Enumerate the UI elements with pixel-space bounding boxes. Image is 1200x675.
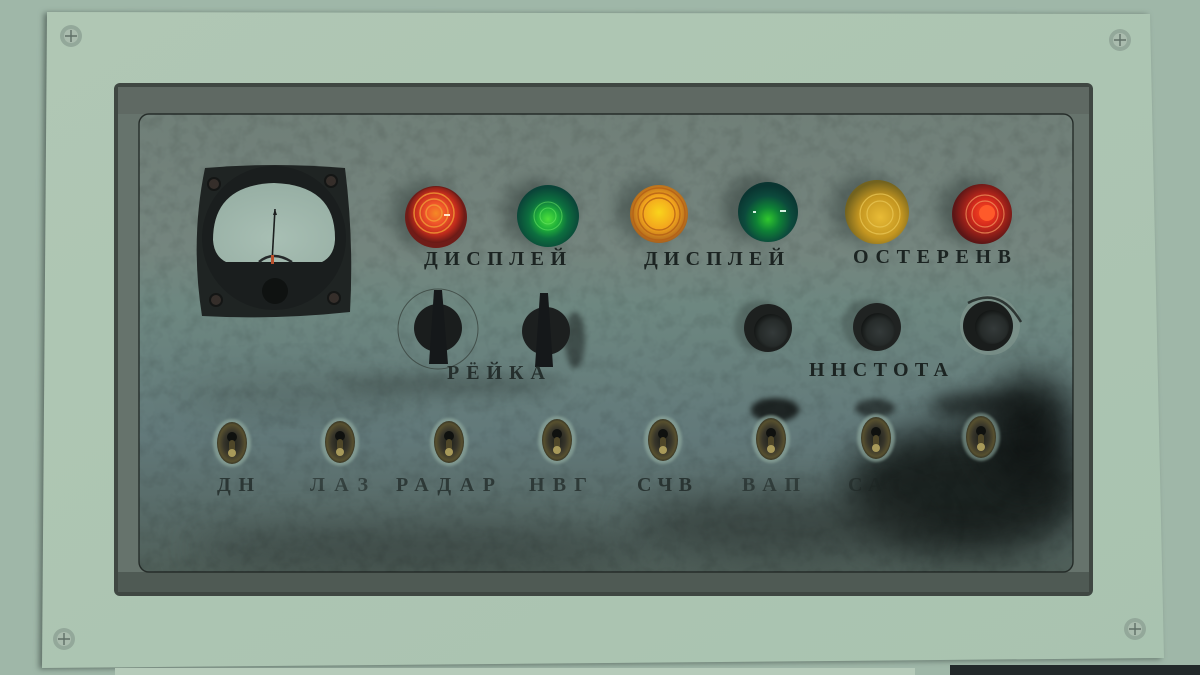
label: ДН: ДН xyxy=(217,474,254,496)
toggle labels xyxy=(217,474,904,496)
lamp: green xyxy=(504,180,579,247)
label: ЛАЗ: ЛАЗ xyxy=(310,474,368,496)
toggle 4 xyxy=(538,416,576,464)
recessed panel rim xyxy=(114,83,1093,596)
meter needle xyxy=(259,209,292,264)
label: РЁЙКА: РЁЙКА xyxy=(447,361,546,384)
toggle 5 xyxy=(644,416,682,464)
instrument plate xyxy=(139,114,1085,572)
rotary switch right xyxy=(522,293,570,367)
indicator lamps xyxy=(392,175,1012,248)
toggle 7 xyxy=(857,414,895,462)
bottom edge strips xyxy=(115,665,1200,675)
toggle 3 xyxy=(430,418,468,466)
toggle 6 xyxy=(752,415,790,463)
label: ДИСПЛЕЙ left: ДИСПЛЕЙ xyxy=(424,247,566,270)
label: ОСТЕРЕНВ: ОСТЕРЕНВ xyxy=(853,246,1011,268)
toggle 8 xyxy=(962,413,1000,461)
push button 3 xyxy=(960,295,1021,355)
label: РАДАР: РАДАР xyxy=(396,474,495,496)
rotary switch left xyxy=(398,289,478,369)
label: ДИСПЛЕЙ middle: ДИСПЛЕЙ xyxy=(644,247,784,270)
label: СЧВ: СЧВ xyxy=(637,474,692,496)
meter dial window xyxy=(213,183,335,262)
lamp: dark green xyxy=(722,176,798,242)
meter adjustment knob xyxy=(262,278,288,304)
lamp: orange xyxy=(616,179,688,243)
label: НВГ: НВГ xyxy=(529,474,587,496)
toggle 1 xyxy=(213,419,251,467)
analog meter xyxy=(197,165,351,317)
toggle switches row xyxy=(213,413,1000,467)
toggle 2 xyxy=(321,418,359,466)
lamp: red right xyxy=(938,178,1012,244)
meter corner screws xyxy=(208,175,340,306)
label: САП: САП xyxy=(848,474,904,496)
push buttons xyxy=(734,295,1021,355)
push button 1 xyxy=(734,300,792,352)
lamp: red xyxy=(392,182,467,248)
push button 2 xyxy=(842,299,901,351)
label: ВАП: ВАП xyxy=(742,474,800,496)
rotary switches xyxy=(398,289,570,369)
label: ННСТОТА: ННСТОТА xyxy=(809,359,949,381)
lamp: yellow xyxy=(831,175,909,244)
